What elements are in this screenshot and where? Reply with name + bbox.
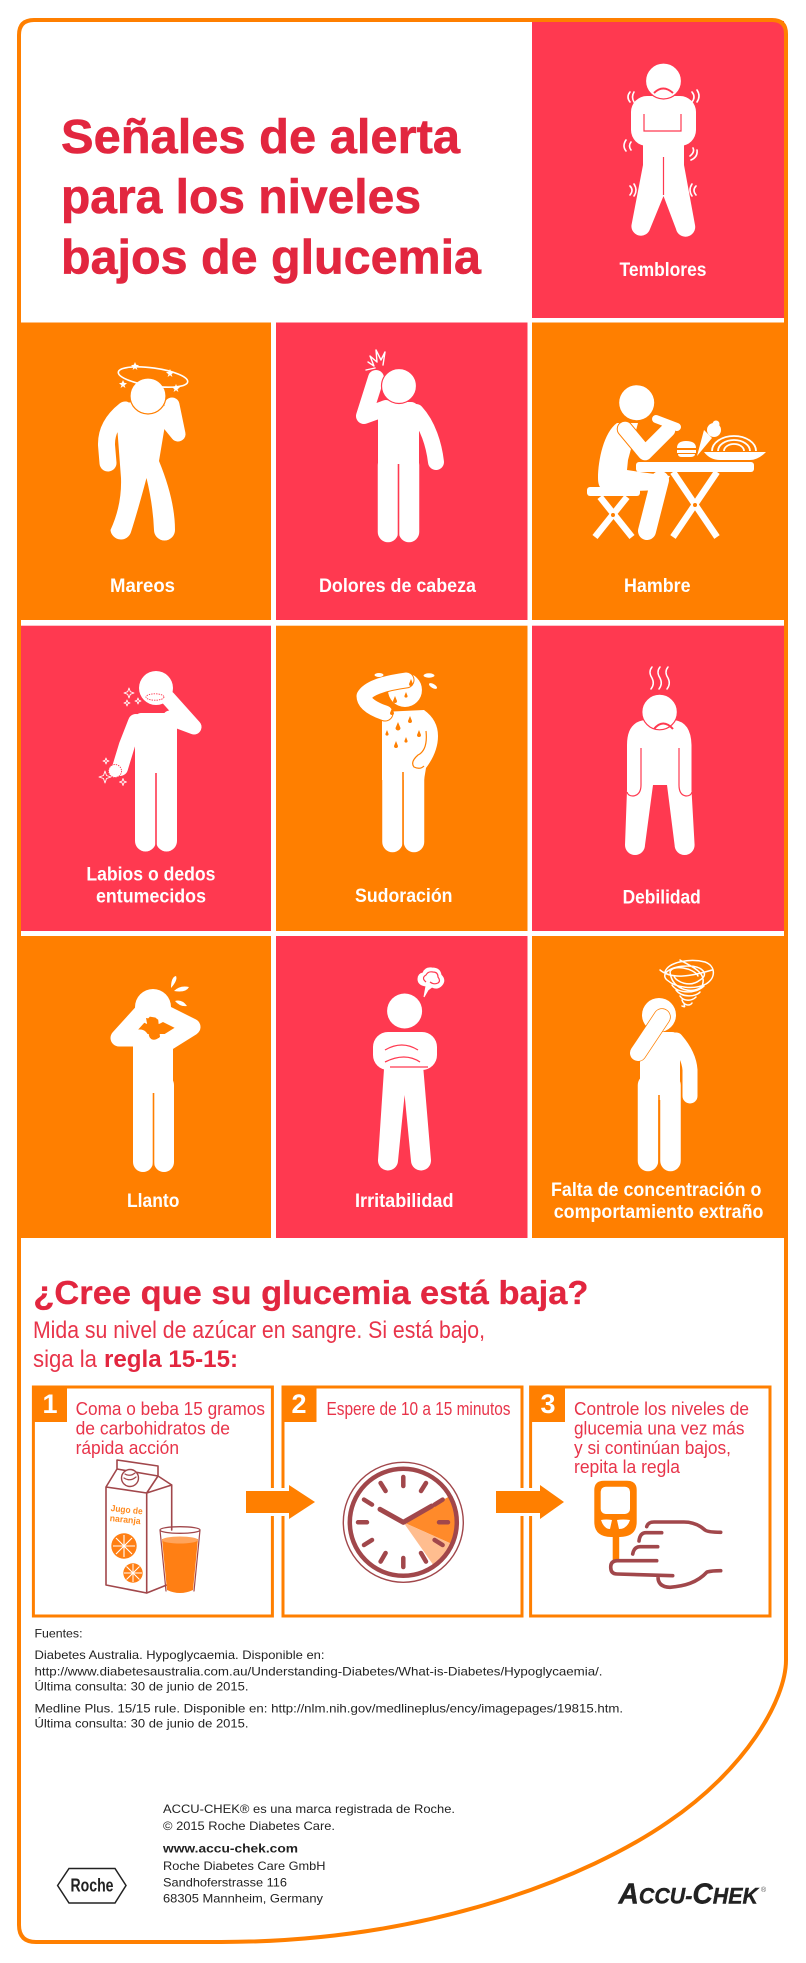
- step text: glucemia una vez más: [574, 1418, 744, 1438]
- panel: llanto: [21, 936, 271, 1238]
- logo: Roche: Roche: [70, 1876, 114, 1896]
- step text: y si continúan bajos,: [574, 1438, 731, 1458]
- icon: confused person with scribble: [638, 960, 713, 1171]
- number tab: [531, 1386, 565, 1422]
- number tab: 2: [291, 1389, 307, 1419]
- step text: [76, 1399, 265, 1458]
- panel: debilidad: [532, 626, 784, 931]
- text block: legal and address: www.accu-chek.com: [162, 1842, 298, 1856]
- step text: de carbohidratos de: [76, 1418, 230, 1438]
- number tab: [33, 1386, 67, 1422]
- arrow: step 2 to 3: [496, 1485, 564, 1519]
- step text: [574, 1399, 749, 1477]
- icon: weak person: [625, 667, 695, 855]
- label: Mareos: [110, 576, 175, 597]
- panel: falta de concentración: [532, 936, 784, 1238]
- icon: irritated person with arms crossed: [373, 968, 444, 1171]
- text block: legal and address: [162, 1802, 455, 1906]
- label: Falta de concentración o: [551, 1180, 761, 1201]
- panel: step 2: [283, 1386, 522, 1616]
- arrow: step 1 to 2: [246, 1485, 315, 1519]
- label: comportamiento extraño: [554, 1202, 764, 1223]
- number tab: [283, 1386, 316, 1422]
- step text: Coma o beba 15 gramos: [76, 1399, 265, 1419]
- icon: juice carton and glass: [106, 1460, 200, 1593]
- step text: rápida acción: [76, 1438, 179, 1458]
- icon: headache person: [364, 350, 436, 540]
- icon: juice carton and glass: naranja: [109, 1513, 142, 1526]
- heading: cree que su glucemia está baja: ¿Cree que su glucemia está baja?: [33, 1274, 588, 1311]
- number tab: 1: [42, 1389, 58, 1419]
- label: Debilidad: [623, 888, 701, 909]
- panel: dolores de cabeza: [276, 322, 528, 620]
- step text: Espere de 10 a 15 minutos: [326, 1399, 510, 1419]
- panel: sudoración: [276, 626, 528, 931]
- text block: legal and address: Sandhoferstrasse 116: [163, 1876, 287, 1890]
- number tab: 3: [540, 1389, 556, 1419]
- icon: crying person: [119, 976, 192, 1172]
- logo: Roche: [58, 1868, 126, 1903]
- text block: regla 15-15 intro: regla 15-15:: [104, 1346, 238, 1373]
- icon: numb person: [99, 671, 194, 852]
- panel: labios o dedos entumecidos: [21, 626, 271, 931]
- icon: clock: [343, 1462, 463, 1582]
- icon: juice carton and glass: Jugo de: [110, 1503, 143, 1516]
- label: Hambre: [624, 576, 690, 597]
- icon: sweating person: [364, 672, 438, 852]
- icon: dizzy person: [106, 362, 189, 540]
- icon: eating person at table: [587, 385, 766, 537]
- title: bajos de glucemia: [61, 232, 481, 284]
- step text: Controle los niveles de: [574, 1399, 749, 1419]
- label: Irritabilidad: [355, 1191, 454, 1212]
- title: para los niveles: [61, 171, 421, 224]
- text block: sources: Fuentes:: [34, 1627, 82, 1641]
- label: [551, 1180, 764, 1223]
- icon: trembling person: [624, 63, 699, 237]
- text block: sources: Medline Plus. 15/15 rule. Disponible en: http://nlm.nih.gov/medlineplus/ency/imagepages/19815.htm.: [34, 1702, 623, 1716]
- text block: legal and address: ACCU-CHEK® es una marca registrada de Roche.: [163, 1802, 455, 1816]
- text block: sources: Diabetes Australia. Hypoglycaemia. Disponible en:: [34, 1648, 324, 1662]
- text block: regla 15-15 intro: siga la: [33, 1346, 98, 1373]
- panel: step 3: [531, 1386, 770, 1616]
- label: entumecidos: [96, 886, 206, 907]
- text block: legal and address: 68305 Mannheim, Germany: [163, 1892, 323, 1906]
- panel: step 1: [33, 1386, 272, 1616]
- panel: temblores: [532, 21, 784, 318]
- text block: regla 15-15 intro: [33, 1317, 485, 1373]
- panel: hambre: [532, 322, 784, 620]
- step text: repita la regla: [574, 1457, 681, 1477]
- title: Señales de alerta: [61, 111, 460, 164]
- panel: mareos: [21, 322, 271, 620]
- label: Temblores: [620, 260, 706, 281]
- text block: legal and address: Roche Diabetes Care GmbH: [163, 1859, 326, 1873]
- label: Dolores de cabeza: [319, 576, 476, 597]
- label: Sudoración: [355, 886, 452, 907]
- label: Labios o dedos: [86, 864, 215, 885]
- text block: legal and address: © 2015 Roche Diabetes Care.: [163, 1819, 335, 1833]
- logo: Accu-Chek: ACCU-CHEK: [618, 1878, 760, 1910]
- label: [86, 864, 215, 907]
- text block: regla 15-15 intro: Mida su nivel de azúcar en sangre. Si está bajo,: [33, 1317, 485, 1344]
- text block: sources: [34, 1627, 623, 1731]
- text block: sources: Última consulta: 30 de junio de 2015.: [34, 1679, 248, 1694]
- text block: sources: http://www.diabetesaustralia.com.au/Understanding-Diabetes/What-is-Diabetes/Hypoglycaemia/.: [34, 1665, 602, 1679]
- icon: glucose meter and hand: [594, 1481, 721, 1587]
- title: [61, 111, 481, 284]
- text block: sources: Última consulta: 30 de junio de 2015.: [34, 1716, 248, 1731]
- logo: Accu-Chek: ®: [761, 1886, 767, 1894]
- label: Llanto: [127, 1191, 179, 1212]
- panel: irritabilidad: [276, 936, 528, 1238]
